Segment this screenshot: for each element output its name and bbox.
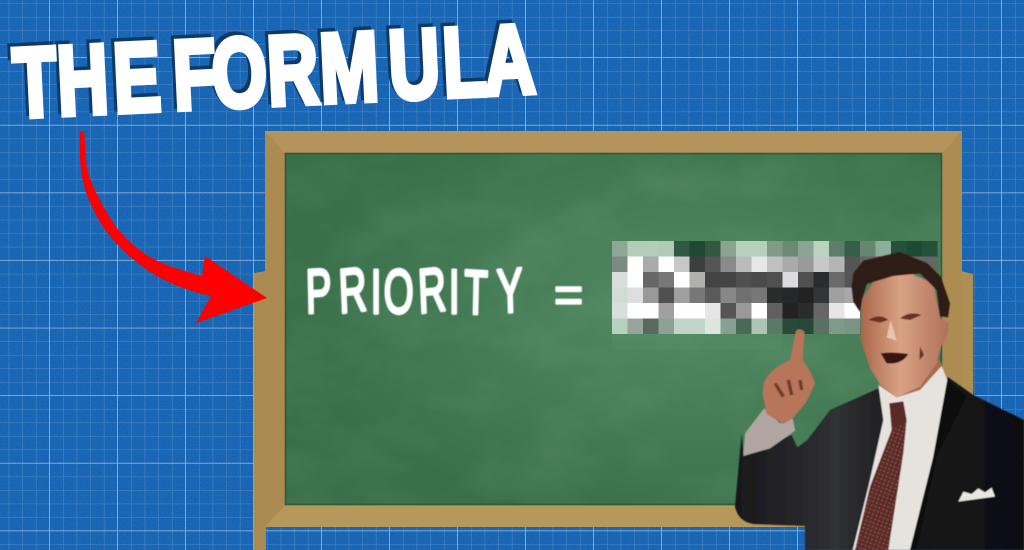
title: the formula [8, 2, 537, 139]
chalkboard stand legs [254, 271, 973, 550]
jacket lapel shadow [910, 380, 967, 550]
neck [877, 353, 943, 400]
arrow pointing to the board [80, 131, 267, 323]
face [861, 272, 949, 397]
shirt [853, 366, 947, 550]
pocket square [958, 488, 995, 502]
green board surface [285, 153, 942, 505]
presenter pointing a finger [735, 252, 1024, 550]
jacket [735, 377, 1024, 550]
title shadow: THE FORMULA [8, 2, 534, 135]
raised hand [763, 329, 815, 424]
tie [855, 401, 907, 550]
facial features [868, 313, 924, 364]
shirt cuff [743, 408, 795, 456]
pixelated censored formula [612, 241, 938, 349]
title lettering: THE FORMULA [11, 5, 537, 139]
chalk text: priority equals: PRIORITY [305, 254, 524, 328]
wooden frame [265, 131, 962, 527]
hair [852, 252, 950, 317]
chalk text: priority equals: = [554, 267, 583, 323]
chalkboard [265, 131, 962, 527]
